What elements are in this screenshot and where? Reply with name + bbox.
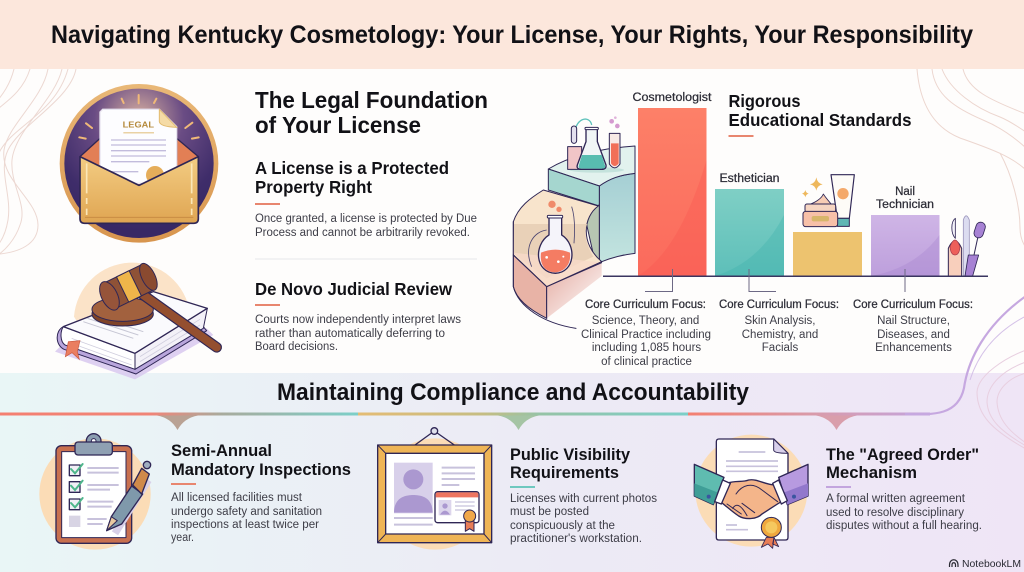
heading: rigorous educational standards: Educational Standards [728, 110, 912, 130]
text block: de novo judicial review [255, 279, 461, 353]
text: agreed order: The "Agreed Order" [826, 445, 979, 464]
item: public visibility [378, 428, 657, 550]
text block: de novo judicial review: Board decisions. [255, 341, 338, 353]
text: agreed order: Mechanism [826, 463, 917, 482]
text: semi-annual inspections: Semi-Annual [171, 441, 272, 460]
item: semi-annual inspections [39, 434, 351, 550]
chart: educational standards bars [513, 92, 988, 368]
decorative flowing lines: right [917, 69, 1024, 248]
bar: nail technician [871, 186, 940, 276]
text: public visibility: Requirements [510, 463, 619, 482]
bar: nail technician: Technician [876, 199, 934, 211]
caption: cosmetologist curriculum: including 1,085 hours [592, 342, 701, 354]
caption: esthetician curriculum: Skin Analysis, [745, 315, 815, 327]
bar: cosmetologist: Cosmetologist [632, 92, 712, 104]
icon: nail tools [948, 216, 987, 276]
icon: legal document in envelope [60, 84, 218, 243]
caption: cosmetologist curriculum: Clinical Practice including [581, 329, 711, 341]
decorative rings on band [977, 350, 1024, 449]
caption: cosmetologist curriculum [581, 299, 711, 368]
text: agreed order: A formal written agreement [826, 493, 966, 505]
icon: legal document in envelope: LEGAL [123, 120, 154, 129]
bar: esthetician: Esthetician [720, 173, 780, 185]
text block: de novo judicial review: rather than automatically deferring to [255, 328, 445, 340]
text: agreed order [826, 445, 982, 532]
caption: esthetician curriculum [719, 299, 839, 354]
caption: nail technician curriculum: Nail Structure, [877, 315, 950, 327]
caption: esthetician curriculum: Chemistry, and [742, 329, 818, 341]
text block: protected property right: Property Right [255, 177, 372, 197]
text: semi-annual inspections [171, 441, 351, 544]
text: public visibility: conspicuously at the [510, 520, 615, 532]
text: semi-annual inspections: undergo safety and sanitation [171, 506, 322, 518]
icon: framed license [378, 428, 492, 550]
title: Navigating Kentucky Cosmetology: Your License, Your Rights, Your Responsibility [51, 21, 973, 49]
caption: nail technician curriculum: Diseases, and [877, 329, 950, 341]
caption: esthetician curriculum: Core Curriculum Focus: [719, 299, 839, 311]
timeline ribbon with markers [0, 296, 1024, 430]
text block: protected property right: Once granted, a license is protected by Due [255, 213, 477, 225]
bar: unlabeled gold [793, 232, 862, 276]
icon: cream jar and tube [802, 175, 854, 227]
section: legal foundation [255, 87, 488, 353]
illustration: curved stair tiers [513, 146, 635, 328]
text: semi-annual inspections: All licensed facilities must [171, 492, 303, 504]
bar: nail technician: Nail [895, 186, 915, 198]
text: public visibility: must be posted [510, 506, 589, 518]
axis line [603, 276, 988, 277]
icon: round flask [529, 201, 575, 273]
caption: cosmetologist curriculum: of clinical practice [601, 356, 692, 368]
bar: esthetician [715, 173, 784, 276]
heading: legal foundation: The Legal Foundation [255, 87, 488, 113]
heading: maintaining compliance: Maintaining Compliance and Accountability [277, 379, 750, 406]
item: agreed order [694, 435, 982, 548]
text block: protected property right: Process and cannot be arbitrarily revoked. [255, 227, 470, 239]
panel: maintaining compliance [0, 296, 1024, 572]
text: public visibility: practitioner's workstation. [510, 533, 642, 545]
caption: cosmetologist curriculum: Science, Theory, and [592, 315, 699, 327]
logo: NotebookLM: NotebookLM [962, 558, 1021, 570]
text: semi-annual inspections: inspections at least twice per [171, 519, 319, 531]
caption: cosmetologist curriculum: Core Curriculum Focus: [585, 299, 706, 311]
heading: rigorous educational standards: Rigorous [728, 91, 801, 111]
connector lines [645, 269, 905, 292]
caption: esthetician curriculum: Facials [762, 342, 798, 354]
decorative flowing lines: top left [0, 69, 76, 255]
text: semi-annual inspections: Mandatory Inspections [171, 460, 351, 479]
icon: gavel on law book [55, 260, 217, 379]
text block: de novo judicial review: De Novo Judicial Review [255, 279, 452, 299]
text: agreed order: disputes without a full hearing. [826, 520, 982, 532]
text: public visibility [510, 445, 657, 545]
text block: protected property right [255, 158, 477, 239]
text block: de novo judicial review: Courts now independently interpret laws [255, 314, 461, 326]
heading: legal foundation [255, 87, 488, 138]
text: agreed order: used to resolve disciplinary [826, 507, 964, 519]
bar: cosmetologist [632, 92, 712, 276]
icon: lab glassware [568, 116, 624, 173]
heading: rigorous educational standards [728, 91, 912, 137]
icon: clipboard and pen [39, 434, 151, 550]
text block: protected property right: A License is a Protected [255, 158, 449, 178]
caption: nail technician curriculum: Core Curriculum Focus: [853, 299, 973, 311]
heading: legal foundation: of Your License [255, 112, 421, 138]
text: public visibility: Licenses with current photos [510, 493, 657, 505]
text: semi-annual inspections: year. [171, 532, 194, 544]
caption: nail technician curriculum [853, 299, 973, 354]
icon: handshake over document [694, 435, 808, 548]
text: public visibility: Public Visibility [510, 445, 631, 464]
caption: nail technician curriculum: Enhancements [875, 342, 952, 354]
header band [0, 0, 1024, 69]
